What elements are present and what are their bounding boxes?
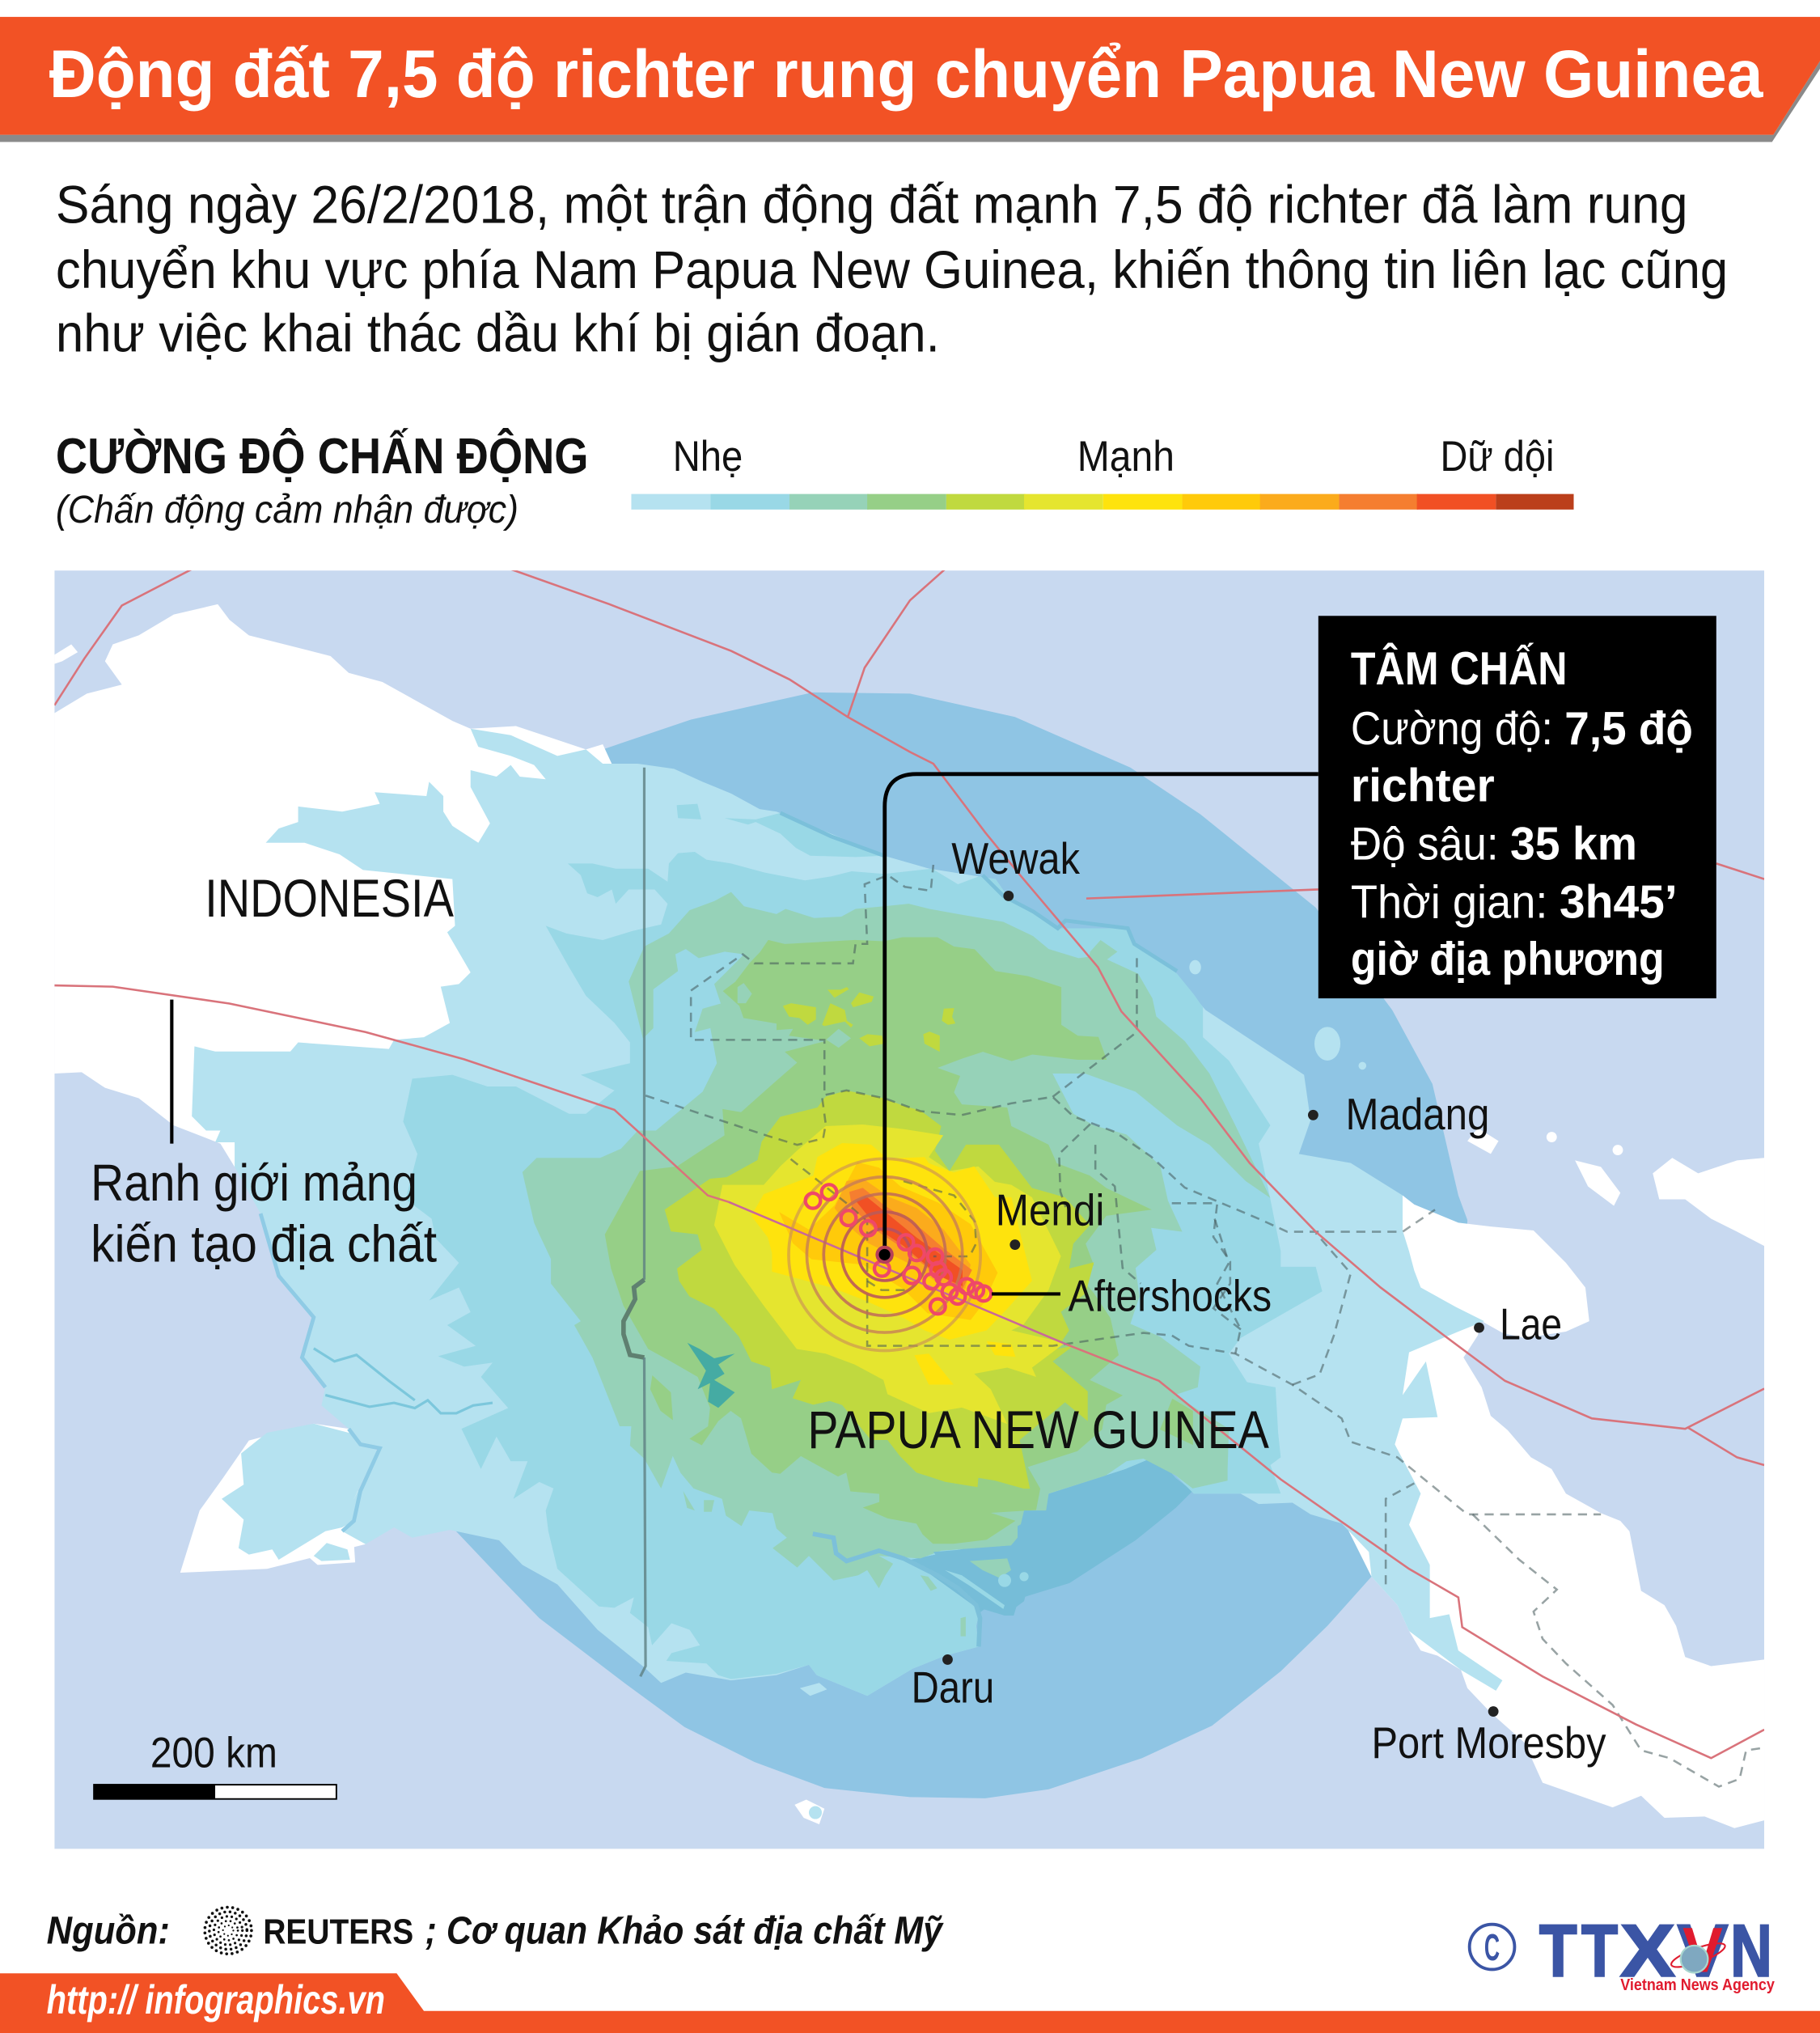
callout: epicentre: Độ sâu: bbox=[1351, 819, 1499, 870]
logo: TTXVN: T bbox=[1581, 1909, 1618, 1992]
legend heading: (Chấn động cảm nhận được) bbox=[56, 488, 518, 532]
logo: TTXVN: N bbox=[1730, 1909, 1772, 1992]
intensity 6 zone bbox=[714, 1125, 1065, 1424]
icon: copyright mark bbox=[1470, 1925, 1514, 1969]
land: east bbox=[1348, 1196, 1764, 1828]
epicentre marker bbox=[875, 1246, 894, 1264]
callout: epicentre: giờ địa phương bbox=[1351, 934, 1665, 985]
source line bbox=[47, 1908, 944, 1954]
Fly river estuary bbox=[813, 1510, 1046, 1646]
provincial borders bbox=[645, 865, 1764, 1786]
aftershocks bbox=[806, 1184, 991, 1314]
city: Lae bbox=[1474, 1300, 1562, 1349]
label: INDONESIA: INDONESIA bbox=[205, 869, 454, 928]
land: south island bbox=[180, 1424, 366, 1573]
source line: REUTERS bbox=[263, 1912, 413, 1951]
intro text bbox=[56, 176, 1728, 362]
legend heading: CƯỜNG ĐỘ CHẤN ĐỘNG bbox=[56, 427, 589, 485]
logo: TTXVN: V bbox=[1678, 1909, 1728, 1992]
sea background bbox=[54, 570, 1764, 1849]
land: west bbox=[55, 604, 612, 1167]
city: Port Moresby: Port Moresby bbox=[1372, 1718, 1606, 1768]
callout: epicentre: Thời gian: bbox=[1351, 877, 1547, 929]
callout: epicentre: TÂM CHẤN bbox=[1351, 642, 1567, 695]
intensity 7 zone bbox=[751, 1143, 1032, 1340]
label: plate boundary: Ranh giới mảng bbox=[91, 1154, 417, 1212]
callout: epicentre: 7,5 độ bbox=[1564, 703, 1693, 755]
coastal water edge bbox=[260, 1213, 380, 1531]
scale bar: 200 km bbox=[150, 1729, 277, 1777]
city: Madang: Madang bbox=[1345, 1090, 1489, 1139]
label: PAPUA NEW GUINEA: PAPUA NEW GUINEA bbox=[807, 1400, 1269, 1459]
footer band bbox=[0, 1973, 1820, 2033]
callout: epicentre: Cường độ: bbox=[1351, 703, 1553, 755]
gulf of Papua bbox=[895, 1456, 1192, 1618]
city: Wewak bbox=[951, 834, 1081, 901]
city: Lae: Lae bbox=[1500, 1300, 1562, 1349]
scale bar bbox=[93, 1729, 336, 1800]
aftershocks leader bbox=[992, 1293, 1060, 1295]
label: Aftershocks: Aftershocks bbox=[1069, 1271, 1272, 1320]
logo: TTXVN: V bbox=[1682, 1915, 1723, 1986]
Indonesia–PNG border bbox=[624, 768, 645, 1676]
icon: copyright mark: C bbox=[1484, 1926, 1500, 1968]
lake bbox=[688, 1343, 734, 1408]
intro text: Sáng ngày 26/2/2018, một trận động đất mạnh 7,5 độ richter đã làm rung bbox=[56, 176, 1688, 235]
legend: intensity scale: Nhẹ bbox=[673, 433, 743, 481]
title: Động đất 7,5 độ richter rung chuyển Papua New Guinea bbox=[49, 36, 1763, 112]
callout: epicentre bbox=[1318, 616, 1716, 998]
rivers bbox=[314, 1349, 493, 1413]
intensity 5 zone bbox=[665, 1091, 1094, 1489]
logo: TTXVN: T bbox=[1539, 1909, 1577, 1992]
shaking zone over the ocean bbox=[452, 692, 1467, 1798]
label: plate boundary bbox=[91, 1154, 437, 1273]
city: Daru: Daru bbox=[912, 1662, 994, 1712]
callout: epicentre: richter bbox=[1351, 760, 1495, 811]
legend: intensity scale: Mạnh bbox=[1077, 433, 1175, 481]
callout: epicentre: 35 km bbox=[1510, 819, 1637, 870]
leader line to epicentre bbox=[885, 774, 1318, 1254]
legend: intensity scale: Dữ dội bbox=[1440, 433, 1554, 481]
intro text: như việc khai thác dầu khí bị gián đoạn. bbox=[56, 303, 940, 362]
logo: TTXVN bbox=[1470, 1909, 1776, 1994]
central shaking zones bbox=[605, 937, 1193, 1544]
intensity 1 zone bbox=[192, 729, 1502, 1696]
label: plate boundary: kiến tạo địa chất bbox=[91, 1214, 437, 1273]
epicentral intensity zones bbox=[779, 1163, 997, 1320]
legend heading bbox=[56, 427, 589, 532]
map panel bbox=[54, 570, 1764, 1849]
intro text: chuyển khu vực phía Nam Papua New Guinea, khiến thông tin liên lạc cũng bbox=[56, 240, 1728, 299]
footer url: http:// infographics.vn bbox=[47, 1977, 385, 2022]
intensity 2 zone bbox=[403, 852, 1323, 1696]
logo: TTXVN: Vietnam News Agency bbox=[1620, 1976, 1776, 1994]
city: Mendi: Mendi bbox=[996, 1186, 1104, 1235]
source line: Nguồn: bbox=[47, 1908, 170, 1952]
legend: intensity scale bbox=[631, 433, 1574, 510]
darker coastal shallows bbox=[781, 813, 1177, 971]
source line: ; Cơ quan Khảo sát địa chất Mỹ bbox=[425, 1908, 944, 1952]
header banner bbox=[0, 17, 1820, 142]
logo: TTXVN: X bbox=[1620, 1909, 1675, 1992]
seismic rings bbox=[789, 1158, 980, 1351]
north highland patches bbox=[738, 983, 955, 1052]
islands bbox=[794, 1128, 1764, 1824]
intensity 3 zone bbox=[523, 892, 1271, 1588]
callout: epicentre: 3h45’ bbox=[1560, 877, 1678, 929]
tectonic plate boundaries bbox=[54, 570, 1764, 1758]
intensity 4 zone bbox=[605, 937, 1152, 1544]
icon: Reuters dot logo bbox=[205, 1908, 252, 1954]
plate boundary leader bbox=[171, 1000, 173, 1144]
city: Wewak: Wewak bbox=[951, 834, 1081, 883]
